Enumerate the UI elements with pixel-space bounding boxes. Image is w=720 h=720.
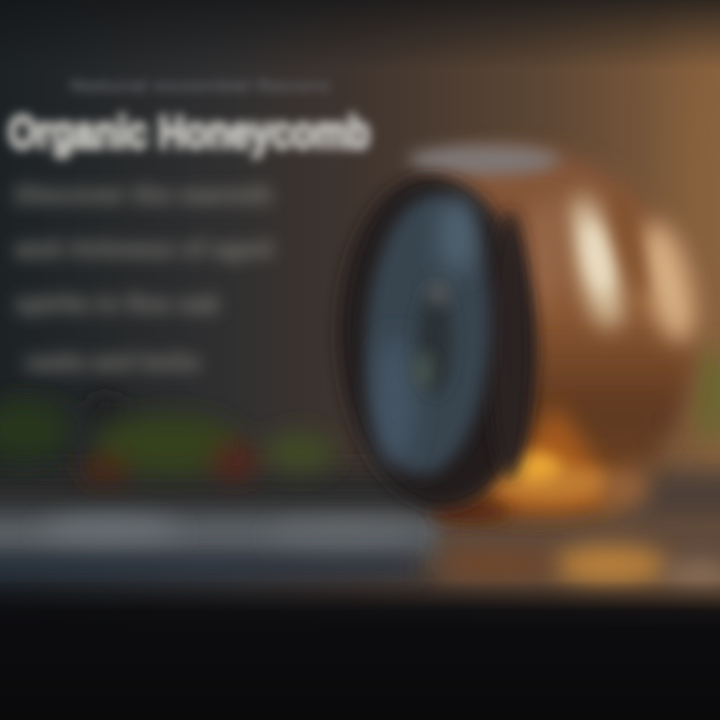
- barrel: [330, 145, 704, 521]
- table surface: [0, 512, 720, 720]
- barrel body: [430, 150, 696, 512]
- body text: [15, 182, 273, 376]
- body text: spirits in fine oak: [15, 291, 221, 318]
- small heading: Natural essential flavors: [70, 78, 330, 95]
- text block: [8, 78, 370, 376]
- barrel highlights: [408, 145, 704, 347]
- greenery: [0, 345, 720, 484]
- title: Organic Honeycomb: [8, 106, 370, 158]
- barrel face: [330, 171, 544, 513]
- body text: and richness of aged: [15, 236, 273, 263]
- body text: Discover the warmth: [15, 182, 273, 209]
- flame glow: [430, 405, 649, 521]
- body text: casks and herbs: [25, 349, 200, 376]
